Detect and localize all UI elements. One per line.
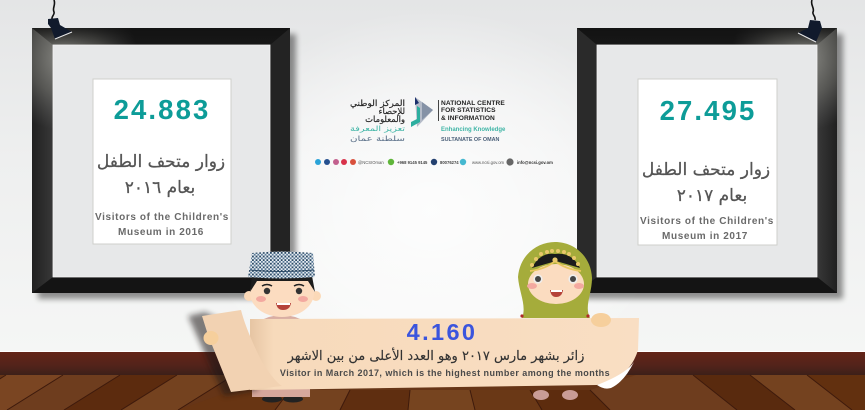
logo: National Centre for Statistics and Information (315, 97, 553, 166)
logo arabic name: للإحصاء (379, 106, 405, 117)
arabic label 2016 (97, 152, 225, 198)
boy brows (262, 284, 304, 286)
arabic label 2016: بعام ٢٠١٦ (125, 178, 195, 198)
boy mouth (276, 303, 291, 310)
english label 2016: Visitors of the Children's (95, 212, 229, 223)
panel: right frame 2017 (577, 28, 847, 303)
girl feet (533, 390, 578, 400)
girl headscarf (518, 242, 592, 318)
boy ears (244, 291, 254, 301)
print area left (93, 79, 231, 244)
logo arabic name: تعزيز المعرفة (350, 124, 405, 133)
boy cap (248, 252, 315, 278)
boy body (258, 315, 306, 330)
girl eyes and cheeks (527, 274, 584, 289)
english label 2017: Museum in 2017 (662, 231, 748, 242)
girl mouth (550, 290, 563, 297)
character: girl (518, 242, 592, 400)
print area right (638, 79, 777, 245)
banner curled corner (597, 362, 634, 389)
social contact row (315, 158, 553, 166)
logo arabic name: والمعلومات (365, 114, 405, 124)
logo english name: FOR STATISTICS (441, 107, 496, 114)
frame border left (32, 28, 290, 293)
banner number: 4.160 (407, 319, 477, 345)
panel: left frame 2016 (32, 28, 300, 303)
skirting board (0, 352, 865, 375)
number 2017: 27.495 (660, 95, 756, 126)
arabic label 2017: بعام ٢٠١٧ (677, 186, 747, 206)
girl hair (532, 254, 580, 268)
english label 2017 (640, 216, 774, 242)
social contact row: www.ncsi.gov.om (472, 160, 505, 165)
social contact row: info@ncsi.gov.om (517, 160, 553, 165)
girl face (528, 264, 584, 304)
frame border right (577, 28, 837, 293)
social contact row: 80076274 (440, 160, 459, 165)
logo arabic name (350, 98, 405, 143)
boy face (250, 269, 314, 317)
logo english name: & INFORMATION (441, 115, 495, 122)
girl headband (530, 249, 581, 271)
social contact row: +968 9145 9145 (397, 160, 428, 165)
boy hair (250, 276, 315, 292)
hand right (591, 313, 611, 327)
english label 2016 (95, 212, 229, 238)
boy feet (262, 396, 282, 402)
icon: right spotlight (798, 0, 822, 42)
mat left (53, 45, 270, 277)
banner scroll (188, 310, 639, 396)
banner rolled end (202, 310, 282, 392)
banner shadow (188, 312, 258, 396)
banner arabic text: زائر بشهر مارس ٢٠١٧ وهو العدد الأعلى من بين الاشهر (287, 347, 584, 364)
logo arabic name: سلطنة عمان (350, 134, 405, 143)
number 2016: 24.883 (114, 94, 210, 125)
floor planks (0, 375, 865, 410)
mat right (597, 45, 817, 277)
logo english name: Enhancing Knowledge (441, 127, 506, 133)
logo mark (411, 97, 433, 127)
logo english name: NATIONAL CENTRE (441, 100, 505, 107)
arabic label 2017 (642, 160, 770, 206)
wooden floor (0, 352, 865, 410)
icon: left spotlight (48, 0, 72, 39)
hand left (204, 331, 218, 345)
character: boy (244, 252, 321, 402)
arabic label 2017: زوار متحف الطفل (642, 160, 770, 180)
social contact row: @NCSIOman (358, 160, 384, 165)
boy eyes and cheeks (256, 288, 308, 302)
logo arabic name: المركز الوطني (350, 98, 405, 108)
girl dress dots (520, 314, 590, 318)
arabic label 2016: زوار متحف الطفل (97, 152, 225, 172)
logo english name (441, 100, 506, 143)
banner body (250, 318, 639, 390)
banner english text: Visitor in March 2017, which is the highest number among the months (280, 368, 610, 378)
logo english name: SULTANATE OF OMAN (441, 137, 499, 143)
english label 2016: Museum in 2016 (118, 227, 204, 238)
english label 2017: Visitors of the Children's (640, 216, 774, 227)
